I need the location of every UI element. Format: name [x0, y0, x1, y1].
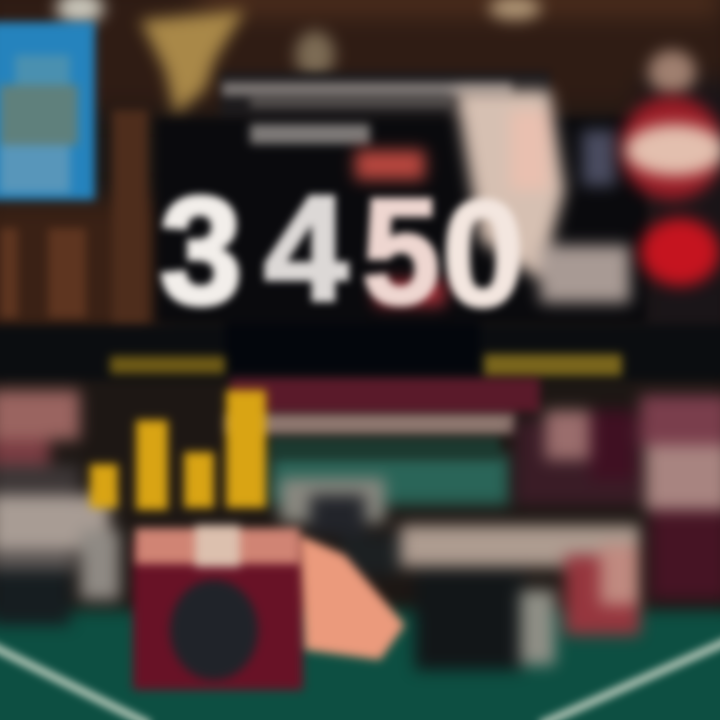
- big number: 5: [362, 167, 440, 335]
- chips stack right: [515, 395, 720, 600]
- big number: 3: [160, 166, 242, 336]
- chips stack center: [280, 478, 640, 670]
- panel: blue poster: [0, 22, 95, 200]
- salmon wedge: [300, 535, 405, 660]
- heading: blurred title lines: [222, 82, 512, 144]
- panel: black headline board: [156, 72, 646, 323]
- dark band: [0, 322, 720, 380]
- chart: yellow bars: [90, 390, 266, 510]
- big number: 0: [442, 169, 524, 337]
- yellow captions: [110, 354, 622, 376]
- maroon stripes: [225, 378, 540, 458]
- big number: [160, 164, 524, 337]
- wooden column and wall panels: [0, 110, 148, 325]
- chip box: red card box: [133, 525, 303, 690]
- figure: white and red costume: [355, 90, 630, 306]
- chips stack left: [0, 390, 120, 625]
- table lines: [0, 640, 720, 720]
- table: green felt: [0, 455, 720, 720]
- ceiling lights and ornaments: [56, 0, 696, 115]
- figure: red and white decoration right: [620, 96, 720, 286]
- big number: 4: [264, 164, 348, 332]
- background: wooden ceiling and wall: [0, 0, 720, 340]
